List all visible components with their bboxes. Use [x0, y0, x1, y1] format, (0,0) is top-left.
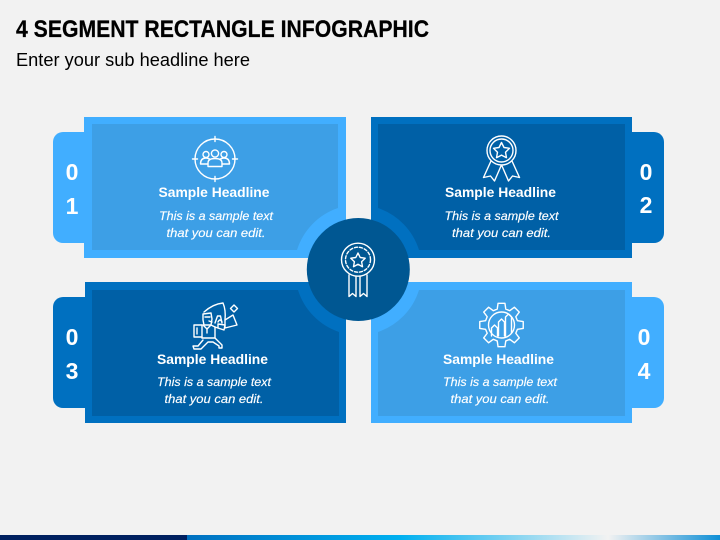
panel: segment 02 [371, 117, 664, 258]
icon: award ribbon [484, 136, 520, 181]
panel: segment 04 [371, 282, 664, 423]
headline 03: Sample Headline [157, 351, 268, 367]
panel: segment 01 [53, 117, 346, 258]
text 04: that you can edit. [450, 392, 550, 406]
headline 04: Sample Headline [443, 351, 554, 367]
icon: runner with megaphone [193, 303, 238, 349]
text 01: This is a sample text [159, 209, 274, 223]
number tab 02: 0 [640, 159, 652, 185]
text 02 [444, 209, 559, 240]
number tab 03: 0 [66, 324, 78, 350]
icon: medal [342, 243, 374, 296]
number tab 01: 1 [66, 193, 79, 219]
text 03 [157, 375, 272, 406]
number tab 01: 0 [66, 159, 78, 185]
text 02: that you can edit. [452, 226, 551, 240]
icon: gear with growth chart [480, 303, 523, 347]
number tab 01 [53, 132, 90, 243]
subtitle: Enter your sub headline here [16, 50, 250, 70]
center circle with medal [307, 218, 410, 321]
number tab 02: 2 [640, 192, 652, 218]
number tab 03 [53, 297, 90, 408]
text 01 [159, 209, 274, 240]
number tab 02 [626, 132, 664, 243]
number tab 04: 0 [638, 324, 650, 350]
text 01: that you can edit. [166, 226, 266, 240]
text 02: This is a sample text [444, 209, 559, 223]
headline 01: Sample Headline [158, 184, 270, 200]
bottom bar [0, 535, 720, 540]
panel: segment 03 [53, 282, 346, 423]
text 04: This is a sample text [443, 375, 558, 389]
number tab 04: 4 [638, 358, 651, 384]
text 03: This is a sample text [157, 375, 272, 389]
number tab 04 [626, 297, 664, 408]
text 03: that you can edit. [164, 392, 264, 406]
number tab 03: 3 [66, 358, 78, 384]
text 04 [443, 375, 558, 406]
icon: target group [192, 136, 238, 182]
title: 4 SEGMENT RECTANGLE INFOGRAPHIC [16, 16, 429, 43]
headline 02: Sample Headline [445, 184, 556, 200]
